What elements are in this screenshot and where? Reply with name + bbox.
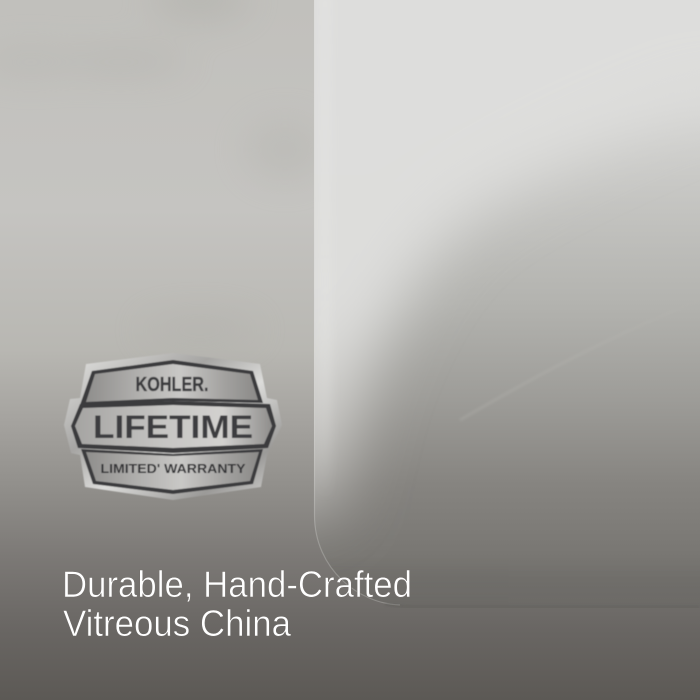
lower rim shadow [385, 604, 700, 607]
badge outer silver shape [64, 353, 282, 500]
basin bottom shade [300, 570, 700, 610]
badge middle band: LIFETIME [71, 401, 276, 453]
sink basin [314, 0, 700, 606]
badge top panel: KOHLER: KOHLER. [136, 374, 208, 396]
warranty badge [64, 353, 282, 500]
basin edge [314, 0, 400, 605]
badge bottom panel: limited warranty: LIMITED' WARRANTY [100, 461, 246, 476]
basin highlight [314, 104, 608, 540]
caption line 2: Vitreous China [63, 603, 291, 644]
basin reflection streak [460, 300, 700, 420]
badge bottom panel: limited warranty [81, 449, 263, 494]
basin left rim light [318, 0, 332, 500]
badge top panel: KOHLER [80, 360, 263, 405]
badge middle band: LIFETIME: LIFETIME [93, 409, 253, 445]
caption [62, 564, 412, 644]
caption line 1: Durable, Hand-Crafted [62, 564, 412, 605]
